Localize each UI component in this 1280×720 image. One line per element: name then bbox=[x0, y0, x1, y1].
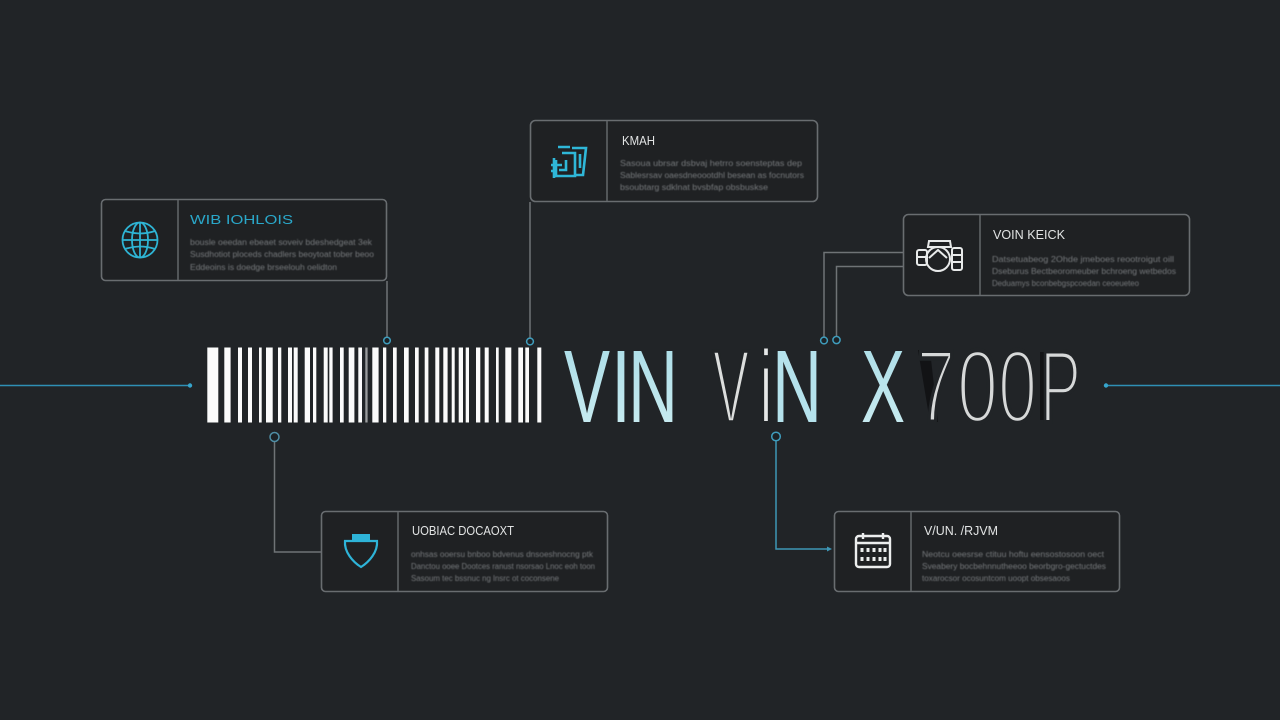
text: card 3 body bbox=[992, 255, 1176, 288]
barcode bbox=[207, 348, 541, 422]
heading: card 4: UOBIAC DOCAOXT bbox=[412, 523, 514, 538]
icon: circuit blocks bbox=[551, 147, 586, 178]
large code: VIN: N bbox=[628, 329, 678, 444]
text: card 4 body: Sasoum tec bssnuc ng lnsrc ot coconsene bbox=[411, 574, 560, 583]
large code: outlined 700P: 7 bbox=[917, 329, 955, 444]
text: card 3 body: Deduamys bconbebgspcoedan ceoeueteo bbox=[992, 279, 1140, 288]
text: card 2 body: bsoubtarg sdklnat bvsbfap obsbuskse bbox=[620, 183, 769, 192]
large code: VIN bbox=[564, 329, 678, 444]
connector: card 1 to barcode bbox=[384, 281, 390, 344]
large code: outlined 700P bbox=[917, 329, 1081, 444]
connector: card 5 to code bbox=[772, 432, 832, 552]
heading: card 1: WIB IOHLOIS bbox=[190, 212, 293, 227]
heading: card 2: KMAH bbox=[622, 133, 655, 148]
text: card 1 body: bousle oeedan ebeaet soveiv bdeshedgeat 3ek bbox=[190, 238, 373, 247]
panel: card 2 bbox=[530, 120, 818, 202]
text: card 5 body bbox=[922, 550, 1106, 583]
text: card 1 body bbox=[190, 238, 375, 272]
icon: shield bbox=[345, 534, 377, 567]
text: card 5 body: Sveabery bocbehnnutheeoo beorbgro-gectuctdes bbox=[922, 562, 1106, 571]
connector: card 2 to barcode bbox=[527, 202, 533, 345]
right axis line bbox=[1104, 383, 1280, 388]
large code: thin ViN: N bbox=[772, 329, 822, 444]
text: card 1 body: Susdhotiot ploceds chadlers beoytoat tober beoo bbox=[190, 250, 375, 259]
text: card 4 body bbox=[411, 550, 595, 583]
icon: calendar bbox=[856, 533, 890, 567]
large code: thin ViN: V bbox=[713, 329, 749, 444]
text: card 5 body: Neotcu oeesrse ctituu hoftu eensostosoon oect bbox=[922, 550, 1105, 559]
panel: card 1 bbox=[102, 200, 386, 280]
large code: thin ViN bbox=[713, 329, 822, 444]
text: card 2 body: Sablesrsav oaesdneoootdhl besean as focnutors bbox=[620, 171, 804, 180]
text: card 4 body: onhsas ooersu bnboo bdvenus dnsoeshnocng ptk bbox=[411, 550, 594, 559]
panel: card 5 bbox=[834, 512, 1120, 592]
large code: outlined 700P: P bbox=[1040, 329, 1081, 444]
text: card 3 body: Datsetuabeog 2Ohde jmeboes reootroigut oill bbox=[992, 255, 1174, 264]
large code: VIN: I bbox=[611, 329, 631, 444]
text: card 4 body: Danctou ooee Dootces ranust nsorsao Lnoc eoh toon bbox=[411, 562, 595, 571]
text: card 3 body: Dseburus Bectbeoromeuber bchroeng wetbedos bbox=[992, 267, 1176, 276]
large code: X: X bbox=[861, 329, 905, 444]
text: card 5 body: toxarocsor ocosuntcom uoopt obsesaoos bbox=[922, 574, 1070, 583]
icon: engine bbox=[917, 241, 962, 271]
connector: card 3 to code, inner bbox=[833, 266, 903, 344]
large code: outlined 700P: 0 bbox=[957, 329, 998, 444]
heading: card 3: VOIN KEICK bbox=[993, 227, 1065, 242]
panel: card 4 bbox=[322, 512, 608, 592]
large code: outlined 700P: 0 bbox=[998, 329, 1037, 444]
text: card 1 body: Eddeoins is doedge brseelouh oelidton bbox=[190, 263, 337, 272]
heading: card 5: V/UN. /RJVM bbox=[924, 523, 998, 538]
text: card 2 body: Sasoua ubrsar dsbvaj hetrro soensteptas dep bbox=[620, 159, 803, 168]
connector: card 4 to barcode bbox=[270, 432, 321, 552]
text: card 2 body bbox=[620, 159, 804, 192]
large code: VIN: V bbox=[564, 329, 610, 444]
large code: thin ViN: i bbox=[760, 329, 772, 444]
icon: globe bbox=[122, 222, 158, 258]
panel: card 3 bbox=[904, 214, 1190, 296]
connector: card 3 to code, outer bbox=[821, 252, 903, 344]
left axis line bbox=[0, 383, 192, 388]
